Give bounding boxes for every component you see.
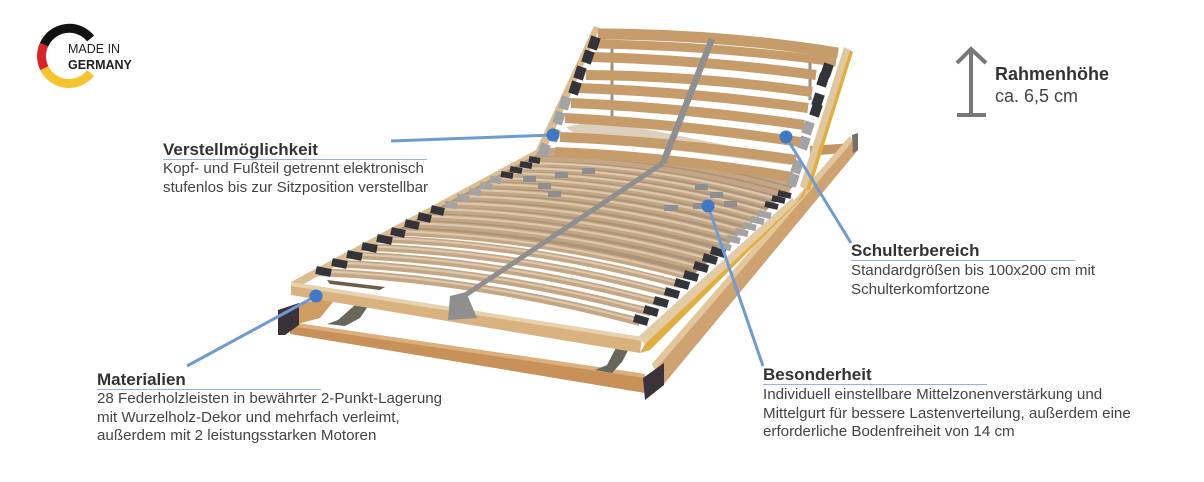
dark slat holders xyxy=(316,37,829,322)
text block: Rahmenhöhe: ca. 6,5 cm xyxy=(995,86,1078,106)
text block: Verstellmöglichkeit: Verstellmöglichkeit xyxy=(163,140,318,159)
logo: made in Germany xyxy=(42,28,133,83)
slatted bed frame illustration xyxy=(278,26,858,400)
motor brackets xyxy=(327,302,632,373)
logo: made in Germany: GERMANY xyxy=(68,58,133,72)
foot deck shadow between rear slats xyxy=(393,150,795,277)
lower frame xyxy=(278,133,858,400)
text block: Materialien: 28 Federholzleisten in bewährter 2-Punkt-Lagerung xyxy=(97,390,442,407)
text block: Verstellmöglichkeit: Kopf- und Fußteil getrennt elektronisch xyxy=(163,160,424,177)
text block: Materialien: außerdem mit 2 leistungsstarken Motoren xyxy=(97,427,376,444)
text block: Materialien: mit Wurzelholz-Dekor und mehrfach verleimt, xyxy=(97,408,400,426)
text block: Materialien: Materialien xyxy=(97,370,186,389)
head support plate xyxy=(566,120,800,165)
text block: Rahmenhöhe xyxy=(995,64,1109,106)
text block: Besonderheit xyxy=(763,365,1131,440)
zone reinforcement sliders xyxy=(523,168,737,211)
icon: frame height arrow xyxy=(957,49,986,115)
text block: Rahmenhöhe: Rahmenhöhe xyxy=(995,64,1109,84)
callout line: Schulterbereich xyxy=(780,130,851,243)
text block: Schulterbereich: Schulterkomfortzone xyxy=(851,280,990,298)
head section slats xyxy=(555,34,838,177)
text block: Verstellmöglichkeit: stufenlos bis zur Sitzposition verstellbar xyxy=(163,178,428,196)
upper frame xyxy=(291,26,853,353)
text block: Besonderheit: Individuell einstellbare Mittelzonenverstärkung und xyxy=(763,386,1102,403)
callout line: Materialien xyxy=(187,290,322,366)
head support struts xyxy=(612,48,810,130)
text block: Schulterbereich: Standardgrößen bis 100x200 cm mit xyxy=(851,262,1095,279)
centre belt xyxy=(448,39,712,320)
text block: Besonderheit: erforderliche Bodenfreiheit von 14 cm xyxy=(763,423,1015,440)
callout line: Besonderheit xyxy=(702,200,763,366)
foot section slats xyxy=(318,150,795,322)
callout line: Verstellmöglichkeit xyxy=(391,128,560,142)
logo: made in Germany: MADE IN xyxy=(68,42,120,56)
text block: Schulterbereich xyxy=(851,241,1095,298)
text block: Schulterbereich: Schulterbereich xyxy=(851,241,980,260)
text block: Besonderheit: Mittelgurt für bessere Lastenverteilung, außerdem eine xyxy=(763,404,1131,422)
text block: Besonderheit: Besonderheit xyxy=(763,365,872,384)
text block: Verstellmöglichkeit xyxy=(163,140,428,196)
text block: Materialien xyxy=(97,370,442,444)
grey slat holders xyxy=(445,97,810,248)
